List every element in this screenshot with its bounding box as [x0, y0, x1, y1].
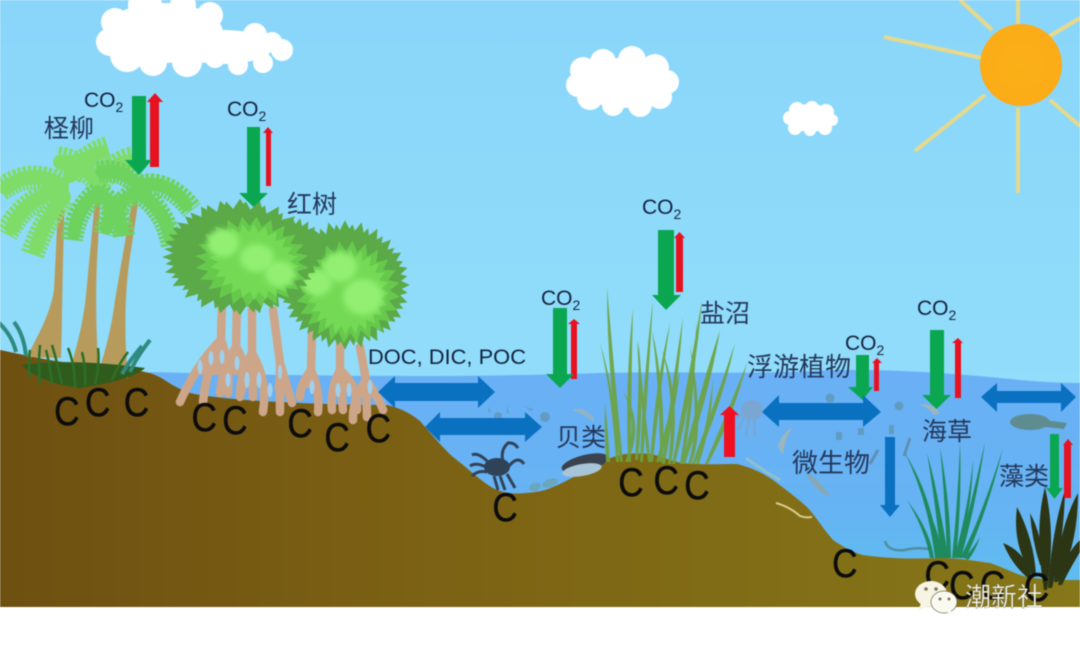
carbon stores: C	[124, 380, 149, 424]
carbon stores: C	[980, 563, 1005, 607]
arrow pair: phytoplankton	[848, 355, 882, 400]
algae	[1003, 487, 1080, 590]
WeChat watermark icon	[915, 581, 957, 616]
habitat labels	[44, 115, 1049, 491]
undergrowth grass	[0, 322, 150, 388]
tamarisk palms	[0, 148, 192, 388]
transport arrow 2	[425, 412, 542, 442]
arrow pair: salt marsh	[652, 230, 685, 310]
sinking arrow	[880, 437, 900, 517]
mangroves	[158, 194, 415, 420]
palm fronds front layer	[72, 171, 192, 246]
habitat labels: 浮游植物	[747, 352, 851, 382]
carbon stores	[54, 380, 1049, 609]
carbon stores: C	[492, 485, 518, 529]
carbon stores: C	[85, 380, 110, 424]
right mangrove crown	[275, 217, 415, 353]
worms	[746, 458, 930, 550]
carbon stores: C	[924, 553, 950, 597]
arrow pair: seagrass	[922, 330, 963, 409]
red arrow: marsh emission	[720, 406, 739, 457]
plankton left	[488, 405, 594, 422]
transport arrow 4	[981, 383, 1076, 412]
CO2 labels: 2	[572, 297, 580, 313]
CO2 labels: CO	[845, 332, 876, 355]
carbon stores: C	[832, 541, 858, 585]
arrow pair: mangrove	[239, 127, 273, 207]
palm trunks	[27, 187, 140, 378]
CO2 labels: 2	[948, 307, 956, 323]
sun with rays	[884, 0, 1080, 193]
CO2 labels: 2	[258, 108, 266, 124]
CO2 labels: CO	[642, 196, 674, 219]
carbon stores: C	[653, 458, 679, 502]
carbon exchange arrows	[125, 93, 1073, 499]
transport arrow 1	[378, 376, 495, 408]
habitat labels: 藻类	[999, 463, 1049, 491]
crab	[470, 443, 524, 490]
palm fronds back layer	[0, 148, 138, 256]
carbon stores: C	[324, 415, 350, 459]
CO2 labels: CO	[227, 98, 258, 121]
page footer strip	[0, 607, 1080, 646]
fish	[1010, 414, 1067, 430]
carbon stores: C	[222, 398, 248, 442]
salt marsh grass	[600, 287, 747, 464]
transport arrow 3	[762, 395, 881, 427]
carbon stores: C	[1024, 565, 1049, 609]
habitat labels: 微生物	[792, 448, 870, 478]
CO2 labels: 2	[876, 342, 884, 358]
plankton right	[778, 394, 940, 496]
cloud centre	[566, 46, 679, 117]
lateral transport arrows	[378, 376, 1076, 517]
marine life	[470, 394, 1067, 550]
DOC DIC POC label: DOC, DIC, POC	[368, 346, 526, 369]
habitat labels: 盐沼	[700, 300, 750, 328]
arrow pair: shellfish	[546, 308, 580, 388]
CO2 labels: CO	[541, 287, 572, 310]
carbon stores: C	[684, 463, 710, 507]
small shells	[528, 477, 559, 493]
CO2 labels	[84, 89, 956, 358]
carbon stores: C	[366, 406, 391, 450]
cloud top left	[96, 0, 293, 77]
habitat labels: 贝类	[556, 424, 606, 452]
jellyfish	[735, 400, 763, 437]
mangrove prop roots	[180, 300, 383, 420]
seagrass	[905, 442, 1003, 560]
carbon stores: C	[191, 395, 217, 439]
carbon stores: C	[949, 563, 975, 607]
carbon stores: C	[618, 460, 644, 504]
ground and sediment	[0, 350, 1080, 607]
CO2 labels: CO	[917, 297, 948, 320]
CO2 labels: 2	[674, 206, 682, 222]
habitat labels: 柽柳	[44, 115, 94, 143]
carbon stores: C	[54, 389, 80, 433]
arrow pair: tamarisk	[125, 93, 163, 175]
left mangrove crown	[158, 194, 325, 320]
arrow pair: algae	[1046, 434, 1073, 499]
carbon stores: C	[287, 401, 313, 445]
habitat labels: 海草	[922, 418, 972, 446]
habitat labels: 红树	[287, 191, 337, 219]
small cloud	[783, 101, 838, 136]
CO2 labels: CO	[84, 89, 116, 112]
clam	[560, 449, 610, 479]
WeChat watermark text: 潮新社	[965, 582, 1043, 612]
CO2 labels: 2	[116, 99, 124, 115]
sea water	[150, 370, 1080, 607]
